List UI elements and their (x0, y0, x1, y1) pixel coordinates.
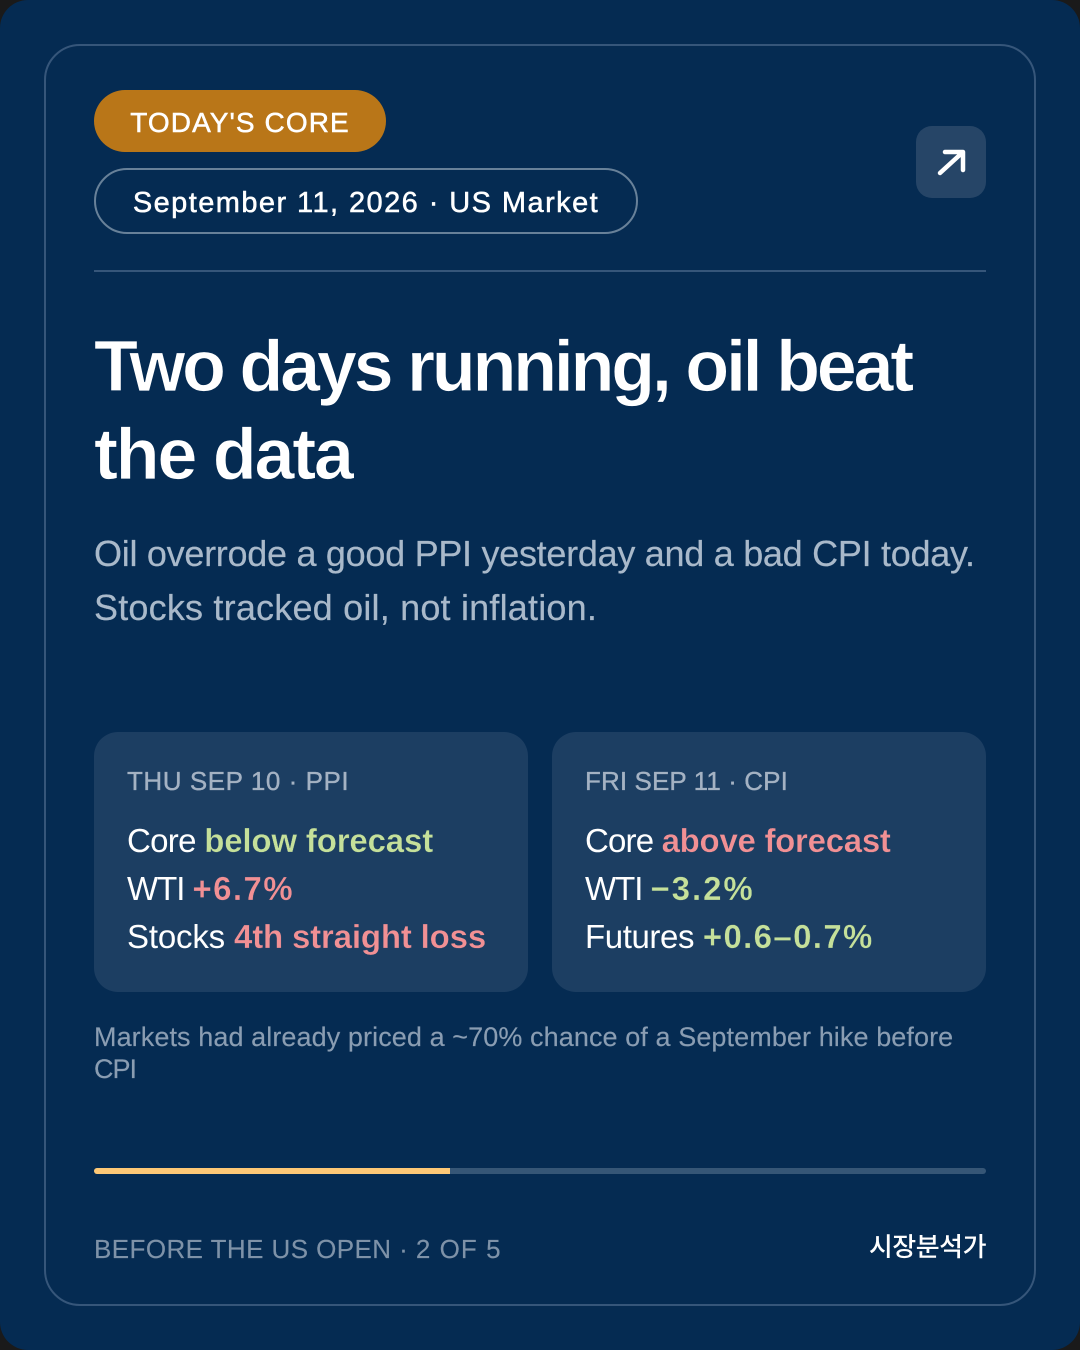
row: core below forecast: Core below forecast (127, 822, 433, 859)
footnote: CPI (94, 1054, 136, 1084)
panel label: Friday: FRI SEP 11 · CPI (585, 766, 788, 796)
badge: today's core (94, 90, 386, 152)
row: core above forecast: Core above forecast (585, 822, 891, 859)
panel label: Thursday: THU SEP 10 · PPI (127, 766, 349, 796)
progress bar (94, 1168, 986, 1174)
header divider (94, 270, 986, 272)
subtitle (94, 533, 975, 628)
title (94, 327, 913, 495)
row: stocks loss: Stocks 4th straight loss (127, 918, 486, 955)
panel: Thursday PPI (94, 732, 528, 992)
subtitle: Stocks tracked oil, not inflation. (94, 587, 597, 628)
footer brand: 시장분석가 (869, 1232, 986, 1262)
badge: today's core: TODAY'S CORE (130, 107, 350, 138)
row: WTI down: WTI −3.2% (585, 870, 755, 907)
date pill: September 11, 2026 · US Market (133, 187, 599, 219)
footnote: Markets had already priced a ~70% chance of a September hike before (94, 1022, 953, 1052)
subtitle: Oil overrode a good PPI yesterday and a bad CPI today. (94, 533, 975, 574)
panel: Friday CPI (552, 732, 986, 992)
row: futures up: Futures +0.6–0.7% (585, 918, 874, 955)
title: Two days running, oil beat (94, 327, 911, 407)
footnote (94, 1022, 953, 1084)
title: the data (94, 415, 352, 495)
footer left text: BEFORE THE US OPEN · 2 OF 5 (94, 1234, 502, 1264)
icon: arrow button (916, 126, 986, 198)
row: WTI up: WTI +6.7% (127, 870, 294, 907)
progress fill (94, 1168, 450, 1174)
date pill (94, 168, 638, 234)
